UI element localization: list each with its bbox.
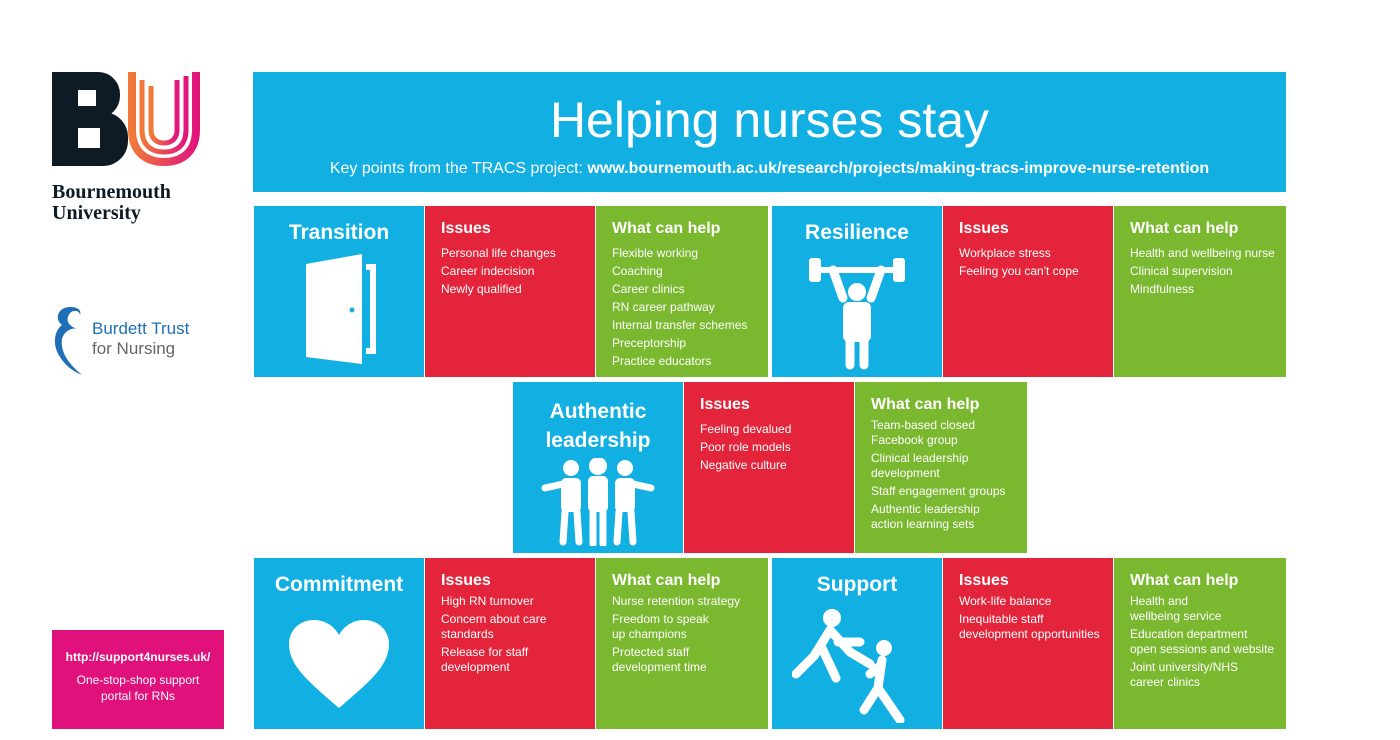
panel: Authentic leadership: Authentic leadership xyxy=(871,502,980,516)
panel: Authentic leadership: Staff engagement groups xyxy=(871,484,1006,498)
panel: Authentic leadership: action learning sets xyxy=(871,517,974,531)
panel: Support: Joint university/NHS xyxy=(1130,660,1238,674)
panel: Commitment: Concern about care xyxy=(441,612,546,626)
panel: Transition: Internal transfer schemes xyxy=(612,318,747,332)
panel: Transition xyxy=(254,206,768,377)
panel: Transition: What can help xyxy=(612,220,720,237)
panel: Support: development opportunities xyxy=(959,627,1100,641)
panel: Resilience: Clinical supervision xyxy=(1130,264,1233,278)
panel: Support: Education department xyxy=(1130,627,1247,641)
callout: support4nurses: http://support4nurses.uk/ xyxy=(66,650,210,664)
panel: Authentic leadership: Poor role models xyxy=(700,440,791,454)
panel: Resilience: Health and wellbeing nurse xyxy=(1130,246,1275,260)
panel: Commitment: High RN turnover xyxy=(441,594,534,608)
callout: support4nurses: One-stop-shop support xyxy=(77,673,199,687)
panel: Resilience xyxy=(772,206,1286,377)
panel: Support: What can help xyxy=(1130,572,1238,589)
panel: Authentic leadership: Clinical leadership xyxy=(871,451,968,465)
panel: Support: open sessions and website xyxy=(1130,642,1274,656)
panel: Support: Work-life balance xyxy=(959,594,1051,608)
logo: Burdett Trust for Nursing xyxy=(54,307,190,375)
panel: Support: Issues xyxy=(959,572,1009,589)
panel: Resilience: Feeling you can't cope xyxy=(959,264,1079,278)
panel: Transition: Career indecision xyxy=(441,264,534,278)
panel: Commitment: Protected staff xyxy=(612,645,689,659)
icon: weightlifter xyxy=(809,258,905,370)
panel: Commitment: development xyxy=(441,660,510,674)
icon: heart xyxy=(289,620,389,708)
title banner xyxy=(253,72,1286,192)
panel: Authentic leadership: Issues xyxy=(700,396,750,413)
logo: Burdett Trust for Nursing: for Nursing xyxy=(92,339,175,358)
icon: door xyxy=(306,254,376,364)
panel: Transition: Career clinics xyxy=(612,282,685,296)
logo: Bournemouth University: Bournemouth xyxy=(52,181,171,203)
icon: helping hand xyxy=(792,609,904,723)
panel: Transition: Transition xyxy=(289,221,389,244)
panel: Commitment: Freedom to speak xyxy=(612,612,709,626)
panel: Commitment: development time xyxy=(612,660,707,674)
panel: Commitment: standards xyxy=(441,627,494,641)
panel: Transition: Preceptorship xyxy=(612,336,686,350)
panel: Transition: Coaching xyxy=(612,264,663,278)
icon: group of people xyxy=(542,458,654,546)
panel: Authentic leadership: development xyxy=(871,466,940,480)
panel: Authentic leadership xyxy=(513,382,1027,553)
logo: Bournemouth University: University xyxy=(52,202,141,224)
title banner: Helping nurses stay xyxy=(550,92,989,148)
panel: Authentic leadership: Facebook group xyxy=(871,433,958,447)
panel: Authentic leadership: Feeling devalued xyxy=(700,422,791,436)
panel: Transition: Newly qualified xyxy=(441,282,522,296)
panel: Authentic leadership: Authentic xyxy=(550,400,646,423)
panel: Commitment xyxy=(254,558,768,729)
panel: Authentic leadership: Negative culture xyxy=(700,458,787,472)
panel: Resilience: Mindfulness xyxy=(1130,282,1194,296)
panel: Support: wellbeing service xyxy=(1130,609,1221,623)
callout: support4nurses xyxy=(52,630,224,729)
panel: Support: Inequitable staff xyxy=(959,612,1044,626)
panel: Support xyxy=(772,558,1286,729)
panel: Transition: Personal life changes xyxy=(441,246,556,260)
panel: Transition: Practice educators xyxy=(612,354,711,368)
panel: Support: Support xyxy=(817,573,897,596)
panel: Commitment: up champions xyxy=(612,627,687,641)
logo: Burdett Trust for Nursing: Burdett Trust xyxy=(92,319,189,338)
panel: Commitment: Commitment xyxy=(275,573,403,596)
panel: Transition: Flexible working xyxy=(612,246,698,260)
logo: Bournemouth University xyxy=(52,72,200,224)
panel: Resilience: Issues xyxy=(959,220,1009,237)
panel: Authentic leadership: Team-based closed xyxy=(871,418,975,432)
panel: Commitment: Issues xyxy=(441,572,491,589)
panel: Transition: Issues xyxy=(441,220,491,237)
panel: Commitment: Release for staff xyxy=(441,645,528,659)
panel: Resilience: What can help xyxy=(1130,220,1238,237)
panel: Authentic leadership: What can help xyxy=(871,396,979,413)
callout: support4nurses: portal for RNs xyxy=(101,689,175,703)
panel: Support: career clinics xyxy=(1130,675,1200,689)
panel: Authentic leadership: leadership xyxy=(545,429,651,452)
panel: Support: Health and xyxy=(1130,594,1188,608)
panel: Resilience: Resilience xyxy=(805,221,909,244)
panel: Commitment: What can help xyxy=(612,572,720,589)
panel: Transition: RN career pathway xyxy=(612,300,715,314)
panel: Resilience: Workplace stress xyxy=(959,246,1051,260)
title banner: Key points from the TRACS project: www.bournemouth.ac.uk/research/projects/making-tracs-improve-nurse-retention xyxy=(330,160,1209,177)
panel: Commitment: Nurse retention strategy xyxy=(612,594,740,608)
